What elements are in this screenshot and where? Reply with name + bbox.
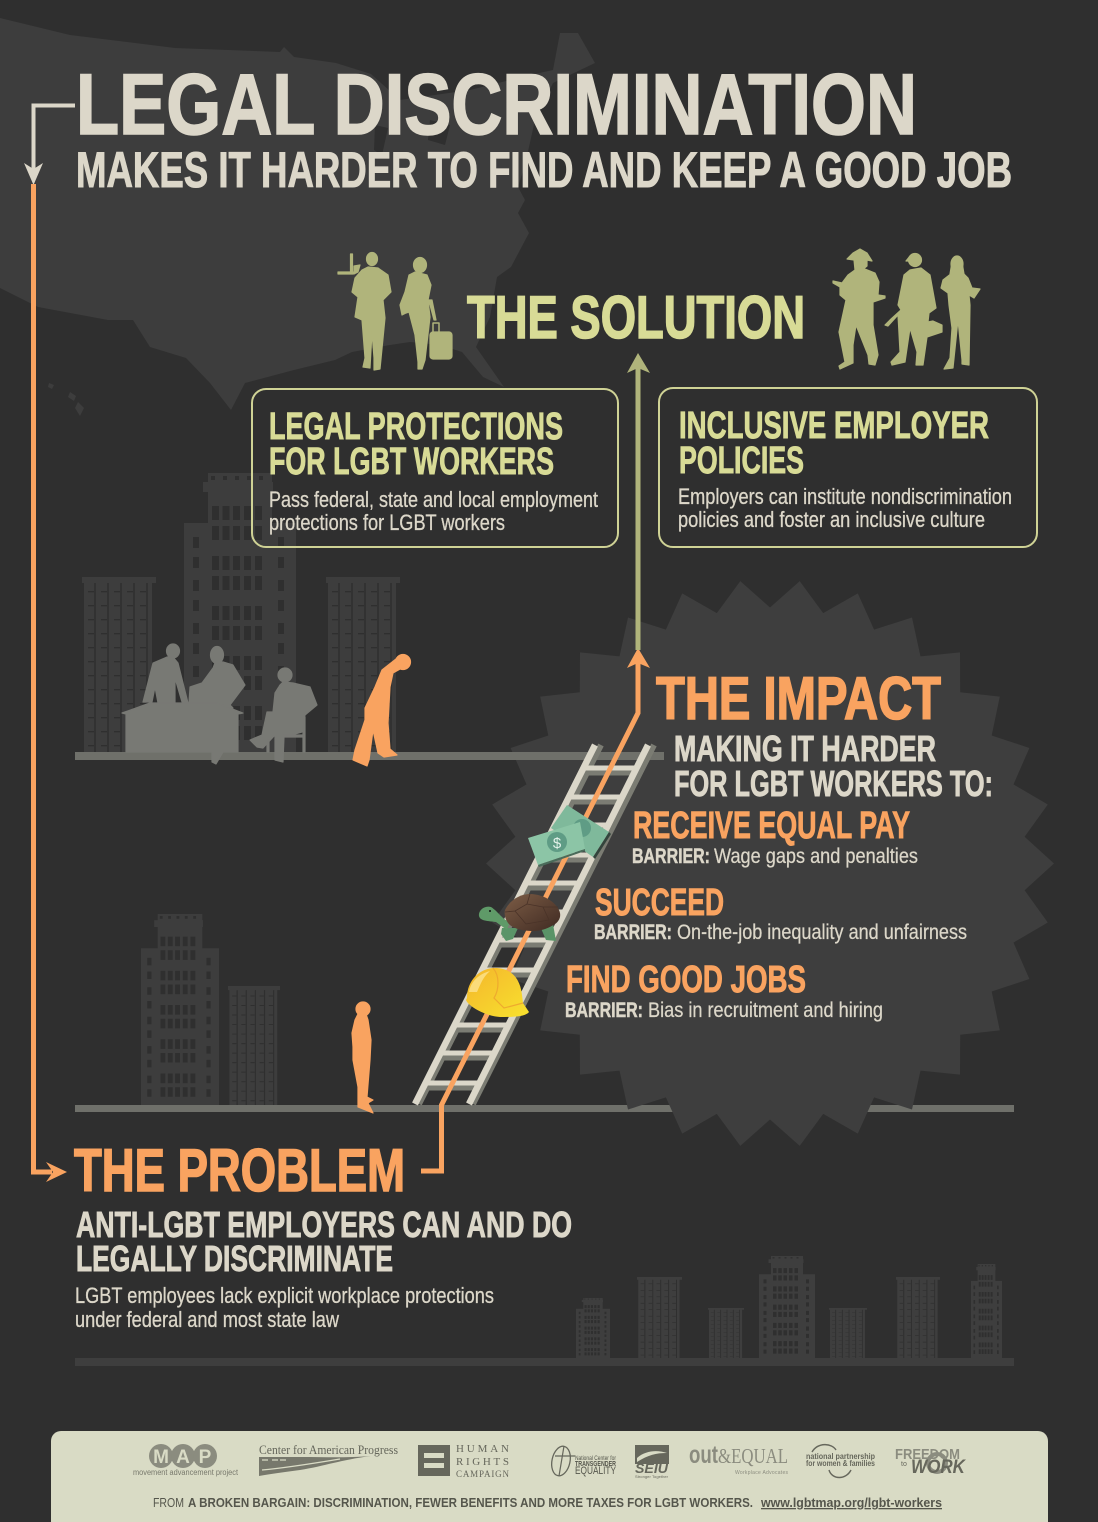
- bottom skyline and ground: [75, 1256, 1014, 1366]
- logo: movement advancement project: M: [153, 1447, 169, 1468]
- footer source line: A BROKEN BARGAIN: DISCRIMINATION, FEWER BENEFITS AND MORE TAXES FOR LGBT WORKERS.: [188, 1495, 753, 1510]
- lower city skyline: [141, 914, 280, 1105]
- logo: national partnership for women and families: [806, 1445, 875, 1478]
- arrow: title to the problem: [24, 106, 75, 1182]
- footer source line: FROM: [153, 1495, 184, 1510]
- panel: inclusive employer policies: [659, 388, 1037, 547]
- heading: the solution: THE SOLUTION: [467, 284, 805, 351]
- logo: center for american progress: [259, 1443, 398, 1476]
- logo: movement advancement project: [133, 1444, 239, 1477]
- section: the problem: under federal and most state law: [75, 1307, 339, 1332]
- logo: freedom to work: WORK: [911, 1457, 966, 1478]
- impact: succeed: On-the-job inequality and unfairness: [677, 921, 967, 944]
- impact: find good jobs: Bias in recruitment and hiring: [648, 999, 883, 1022]
- logo: movement advancement project: P: [199, 1447, 212, 1468]
- logo: national center for transgender equality: National Center for: [575, 1455, 617, 1462]
- title: LEGAL DISCRIMINATION: [76, 57, 917, 153]
- panel: inclusive employer policies: policies and foster an inclusive culture: [678, 507, 985, 532]
- icon: money: [528, 805, 611, 867]
- icon: money: $: [553, 835, 562, 852]
- panel: legal protections: protections for LGBT workers: [269, 510, 505, 535]
- upper city skyline: [82, 473, 400, 752]
- icon: turtle: [479, 894, 560, 941]
- impact: succeed: SUCCEED: [595, 882, 724, 924]
- logo: movement advancement project: A: [176, 1447, 190, 1468]
- heading: the impact: THE IMPACT: [656, 665, 941, 732]
- logo: out and equal: &EQUAL: [718, 1444, 788, 1468]
- arrow: impact to solution: [627, 353, 650, 650]
- impact: succeed: BARRIER:: [594, 921, 672, 944]
- logo: seiu: SEIU: [635, 1460, 669, 1476]
- logo: movement advancement project: movement advancement project: [133, 1468, 239, 1477]
- logo: out and equal: Workplace Advocates: [735, 1470, 788, 1476]
- logo: seiu: Stronger Together: [635, 1474, 669, 1479]
- panel: inclusive employer policies: POLICIES: [679, 440, 804, 482]
- figures: business people at desk: [122, 644, 317, 764]
- impact: find good jobs: [565, 959, 883, 1022]
- ladder: [415, 745, 654, 1104]
- heading: the impact: [656, 665, 993, 804]
- impact: receive equal pay: Wage gaps and penalties: [714, 845, 918, 868]
- logo: out and equal: [689, 1441, 788, 1476]
- logo: freedom to work: FREEDOM: [895, 1446, 960, 1463]
- logo: freedom to work: [895, 1446, 966, 1478]
- panel: legal protections: Pass federal, state and local employment: [269, 487, 598, 512]
- panel: inclusive employer policies: INCLUSIVE EMPLOYER: [679, 405, 989, 447]
- ground line: lower: [75, 1105, 1014, 1112]
- logo: human rights campaign: RIGHTS: [456, 1456, 509, 1468]
- impact: receive equal pay: BARRIER:: [632, 845, 710, 868]
- panel: legal protections: LEGAL PROTECTIONS: [269, 406, 563, 448]
- logo: human rights campaign: [418, 1443, 510, 1479]
- section: the problem: THE PROBLEM: [74, 1137, 405, 1204]
- panel: legal protections: FOR LGBT WORKERS: [269, 441, 554, 483]
- impact: succeed: [594, 882, 967, 944]
- figure: discouraged worker: [353, 654, 410, 766]
- panel: legal protections: [252, 389, 618, 547]
- ground line: upper: [75, 752, 664, 760]
- logo: national center for transgender equality: [549, 1444, 617, 1478]
- arrow: problem to impact: [421, 648, 650, 1171]
- logo: national center for transgender equality: TRANSGENDER: [575, 1459, 616, 1468]
- logo: national center for transgender equality: EQUALITY: [575, 1465, 616, 1477]
- impact: find good jobs: BARRIER:: [565, 999, 643, 1022]
- figure: worker looking up: [352, 1002, 373, 1113]
- logo: out and equal: out: [689, 1441, 718, 1469]
- section: the problem: ANTI-LGBT EMPLOYERS CAN AND DO: [76, 1204, 572, 1245]
- panel: footer: [51, 1431, 1048, 1522]
- icon: hard hat: [466, 968, 529, 1017]
- footer source line: www.lgbtmap.org/lgbt-workers: [760, 1495, 942, 1510]
- title: [76, 57, 1012, 198]
- heading: the impact: MAKING IT HARDER: [674, 728, 936, 769]
- impact: receive equal pay: [632, 805, 918, 868]
- figures: trades workers: [833, 249, 980, 369]
- impact: receive equal pay: RECEIVE EQUAL PAY: [633, 805, 910, 847]
- section: the problem: LEGALLY DISCRIMINATE: [76, 1238, 393, 1279]
- figures: service workers: [338, 252, 452, 370]
- logo: center for american progress: Center for American Progress: [259, 1443, 398, 1457]
- section: the problem: LGBT employees lack explicit workplace protections: [75, 1283, 494, 1308]
- logo: human rights campaign: HUMAN: [456, 1443, 509, 1455]
- logo: national partnership for women and families: national partnership: [806, 1452, 875, 1461]
- starburst: impact background: [486, 581, 1054, 1146]
- impact: find good jobs: FIND GOOD JOBS: [566, 959, 806, 1001]
- panel: inclusive employer policies: Employers can institute nondiscrimination: [678, 484, 1012, 509]
- logo: national partnership for women and families: for women & families: [806, 1459, 875, 1468]
- logo: freedom to work: to: [901, 1461, 907, 1468]
- section: the problem: [74, 1137, 572, 1332]
- logo: human rights campaign: CAMPAIGN: [456, 1469, 510, 1479]
- logo: seiu: [635, 1445, 669, 1479]
- map of the United States: [0, 18, 595, 416]
